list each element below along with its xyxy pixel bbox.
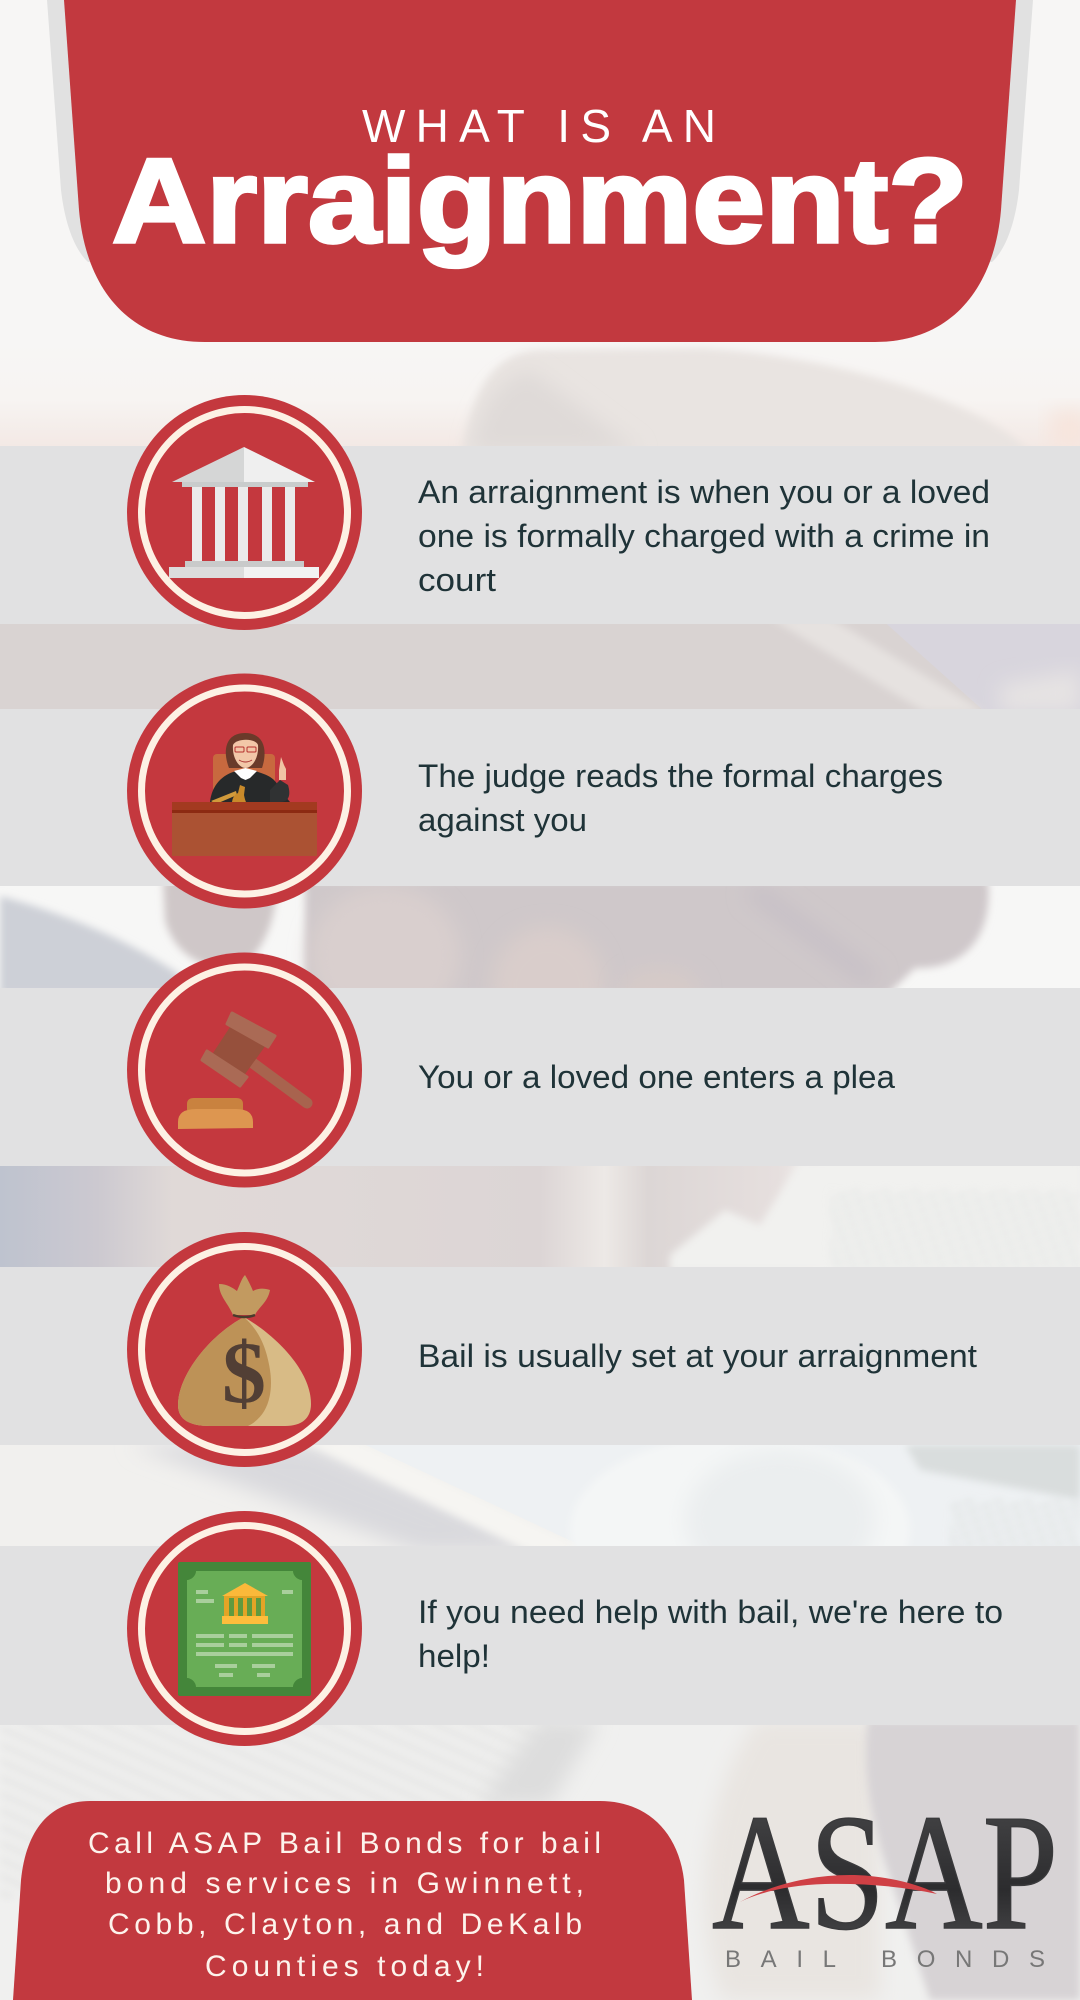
title: what is an: WHAT IS AN xyxy=(362,100,716,152)
step 1: court text: An arraignment is when you or a loved xyxy=(418,474,990,510)
step 1: court text xyxy=(418,474,990,598)
footer call-to-action panel: Cobb, Clayton, and DeKalb xyxy=(108,1908,582,1941)
icon: money bag xyxy=(178,1275,311,1426)
band 3 xyxy=(0,988,1080,1166)
icon: gavel and block xyxy=(178,1013,307,1129)
icon: certificate xyxy=(178,1562,311,1696)
header panel with title xyxy=(64,0,1016,342)
step 1: court text: court xyxy=(418,562,496,598)
icon badge: bail certificate xyxy=(127,1511,362,1746)
step 2: judge text xyxy=(418,758,943,838)
icon: courthouse building xyxy=(169,447,319,578)
step 5: help text: help! xyxy=(418,1638,490,1674)
band 4 xyxy=(0,1267,1080,1445)
footer call-to-action panel: bond services in Gwinnett, xyxy=(105,1867,584,1900)
step 5: help text: If you need help with bail, we're here to xyxy=(418,1594,1003,1630)
icon badge: judge xyxy=(127,674,362,908)
footer call-to-action panel xyxy=(13,1801,692,2000)
icon badge: courthouse xyxy=(127,395,362,630)
dollar sign: $ xyxy=(222,1325,266,1422)
icon badge: money bag xyxy=(127,1232,362,1467)
step 4: bail text: Bail is usually set at your arraignment xyxy=(418,1338,977,1374)
footer call-to-action panel: Call ASAP Bail Bonds for bail xyxy=(88,1827,601,1860)
step 2: judge text: against you xyxy=(418,802,587,838)
footer call-to-action panel: Counties today! xyxy=(205,1950,484,1983)
step 1: court text: one is formally charged with a crime in xyxy=(418,518,990,554)
band 2 xyxy=(0,709,1080,886)
icon: judge at bench xyxy=(172,733,317,856)
icon badge: gavel xyxy=(127,952,362,1188)
band 1 xyxy=(0,446,1080,624)
step 5: help text xyxy=(418,1594,1003,1674)
step 3: plea text: You or a loved one enters a plea xyxy=(418,1059,895,1095)
logo swoosh xyxy=(740,1875,937,1902)
step 2: judge text: The judge reads the formal charges xyxy=(418,758,943,794)
title: arraignment: Arraignment? xyxy=(112,134,968,268)
band 5 xyxy=(0,1546,1080,1725)
logo tagline: BAIL BONDS xyxy=(725,1946,1045,1973)
header shadow panel xyxy=(47,0,1033,262)
